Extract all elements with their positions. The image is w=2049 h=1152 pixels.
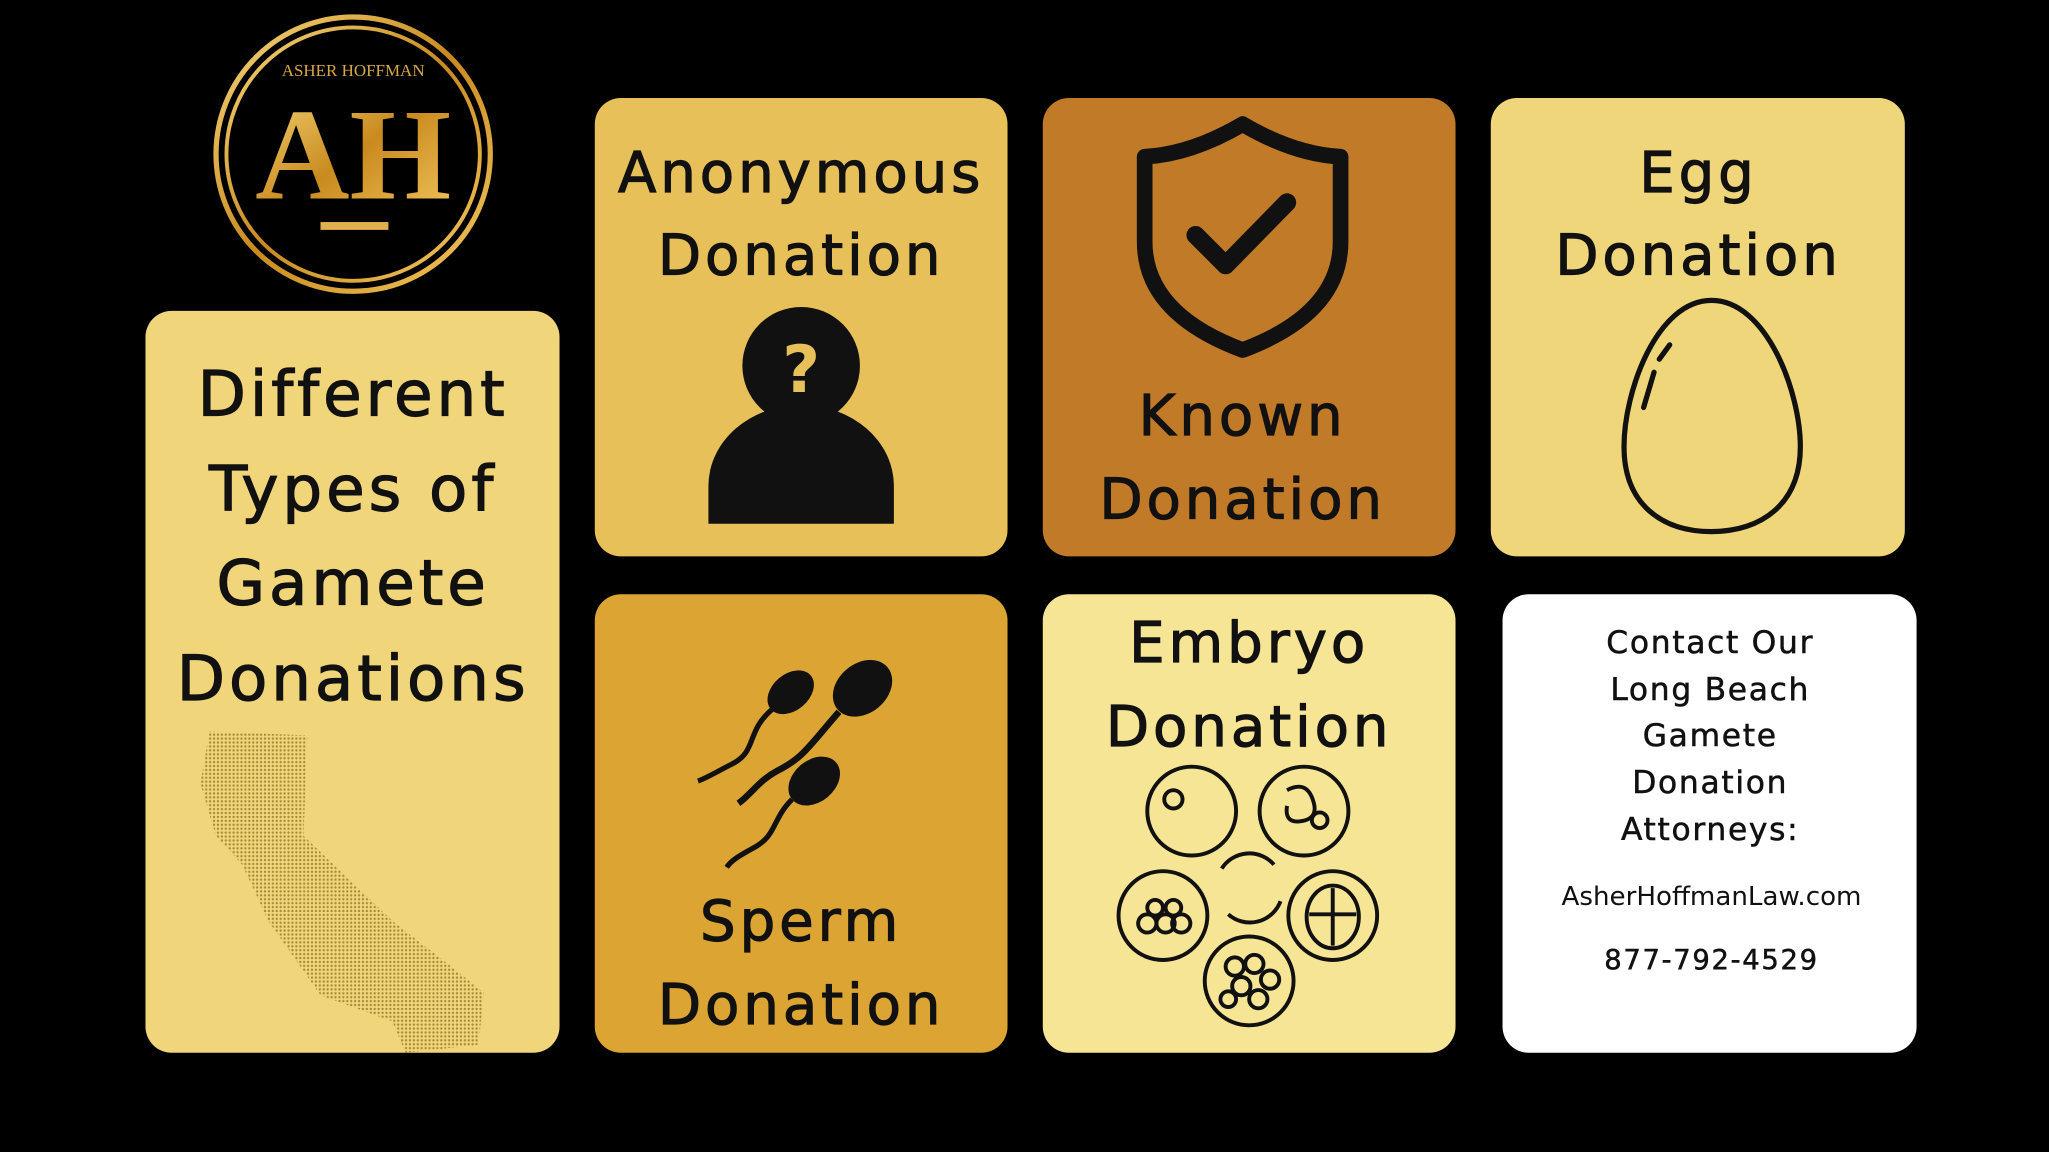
panel: contact: Long Beach [1610, 672, 1810, 708]
panel: contact [1503, 594, 1917, 1053]
panel: egg donation [1491, 98, 1905, 556]
icon: sperm [698, 648, 904, 867]
panel: title: Donations [177, 642, 530, 715]
panel: anonymous donation: Anonymous [618, 141, 984, 206]
icon: person with question: ? [782, 332, 820, 408]
logo: ASHER HOFFMAN [282, 61, 425, 80]
panel: sperm donation: Donation [658, 973, 944, 1038]
icon: egg [1624, 300, 1800, 532]
panel: sperm donation [595, 594, 1008, 1053]
panel: known donation [1043, 98, 1456, 556]
icon: shield check [1145, 124, 1341, 350]
panel: egg donation: Egg [1639, 141, 1758, 206]
panel: contact: Donation [1632, 765, 1788, 801]
logo: AH [255, 84, 451, 228]
panel: embryo donation: Embryo [1129, 611, 1369, 676]
panel: contact: Contact Our [1606, 625, 1814, 661]
panel: title [145, 311, 560, 1053]
icon: embryo stages [1119, 767, 1377, 1025]
panel: embryo donation: Donation [1106, 695, 1392, 760]
panel: title: Types of [208, 453, 497, 526]
panel: contact: 877-792-4529 [1604, 945, 1819, 976]
panel: contact: Gamete [1643, 718, 1778, 754]
panel: title: Gamete [217, 547, 490, 620]
panel: anonymous donation: Donation [658, 223, 944, 288]
panel: known donation: Known [1139, 384, 1347, 449]
panel: title: Different [198, 357, 509, 430]
map: California [200, 731, 484, 1053]
panel: contact: Attorneys: [1621, 812, 1799, 848]
panel: egg donation: Donation [1555, 223, 1842, 288]
panel: embryo donation [1043, 594, 1456, 1053]
panel: contact: AsherHoffmanLaw.com [1562, 882, 1861, 912]
panel: anonymous donation [595, 98, 1008, 556]
panel: sperm donation: Sperm [700, 889, 902, 954]
icon: person with question [708, 307, 894, 524]
logo [216, 17, 490, 291]
panel: known donation: Donation [1099, 468, 1386, 533]
